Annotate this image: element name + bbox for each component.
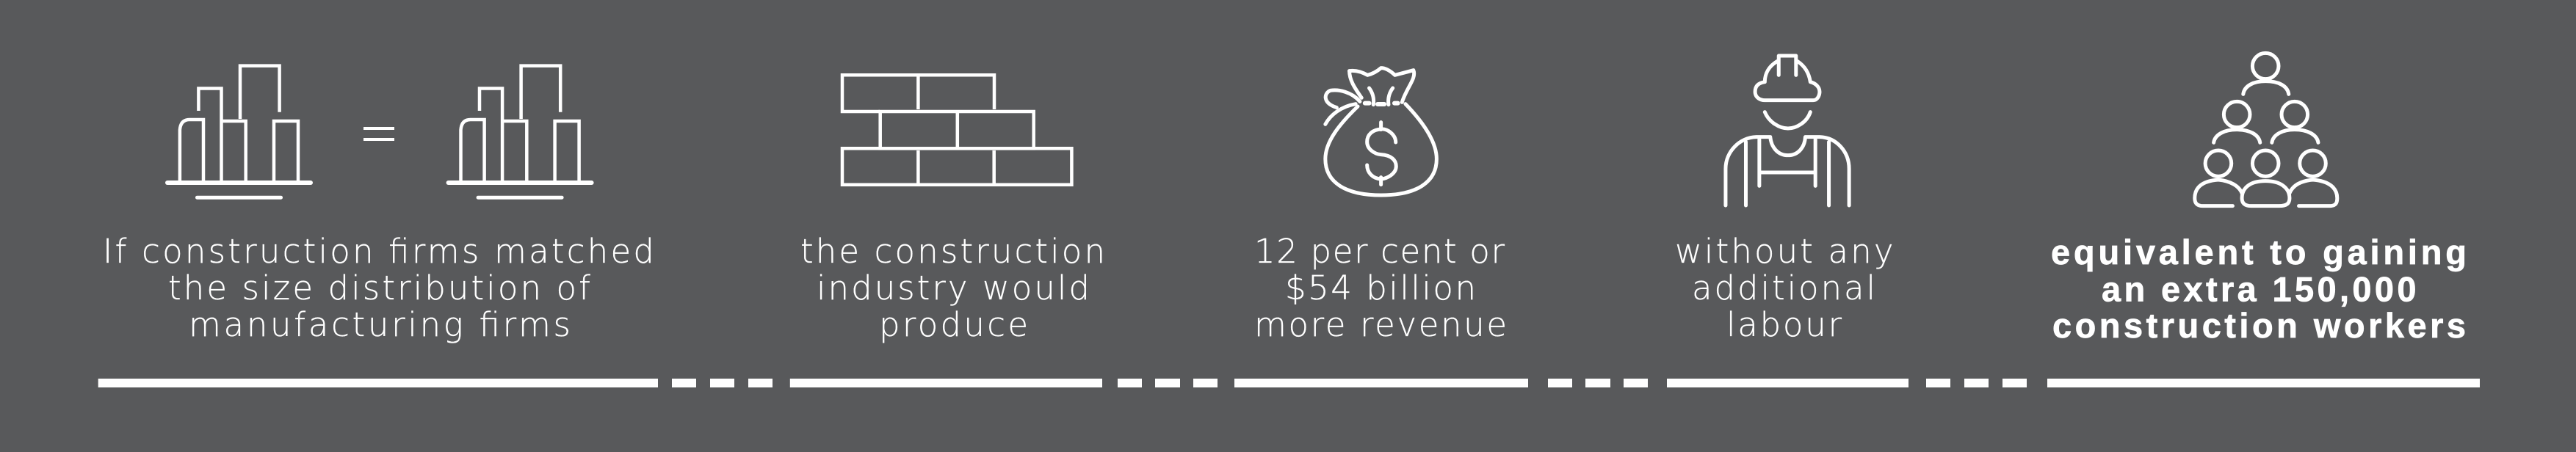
text: equivalent to gaining an extra 150,000 construction workers	[2051, 233, 2467, 345]
text: 12 per cent or $54 billion more revenue: more revenue	[1254, 305, 1507, 344]
text: if construction firms matched: If construction firms matched	[103, 232, 654, 271]
icon: money bag	[1325, 68, 1436, 195]
text: without any additional labour	[1675, 232, 1893, 344]
icon: equals sign	[363, 127, 394, 141]
icon: city buildings (manufacturing firms)	[449, 66, 592, 197]
text: without any additional labour: additional	[1692, 269, 1875, 307]
text: equivalent to gaining an extra 150,000 construction workers: equivalent to gaining	[2051, 233, 2467, 271]
icon: group of workers	[2195, 53, 2337, 206]
text: without any additional labour: labour	[1726, 305, 1842, 344]
text: 12 per cent or $54 billion more revenue	[1254, 232, 1507, 344]
icon: city buildings (construction firms)	[167, 66, 311, 197]
text: the construction industry would produce: the construction	[800, 232, 1105, 271]
text: the construction industry would produce: produce	[879, 305, 1028, 344]
text: if construction firms matched: the size distribution of	[168, 269, 590, 307]
text: if construction firms matched: manufacturing firms	[189, 305, 571, 344]
text: without any additional labour: without any	[1675, 232, 1893, 271]
text: the construction industry would produce	[800, 232, 1105, 344]
icon: construction worker	[1726, 56, 1849, 205]
text: the construction industry would produce: industry would	[817, 269, 1090, 307]
text: 12 per cent or $54 billion more revenue: 12 per cent or	[1254, 232, 1505, 271]
dashed timeline bar	[98, 379, 2480, 387]
text: equivalent to gaining an extra 150,000 construction workers: construction workers	[2052, 306, 2466, 345]
text: 12 per cent or $54 billion more revenue: $54 billion	[1285, 269, 1476, 307]
text: if construction firms matched	[103, 232, 654, 344]
text: equivalent to gaining an extra 150,000 construction workers: an extra 150,000	[2102, 270, 2416, 308]
icon: brick wall	[842, 75, 1071, 185]
